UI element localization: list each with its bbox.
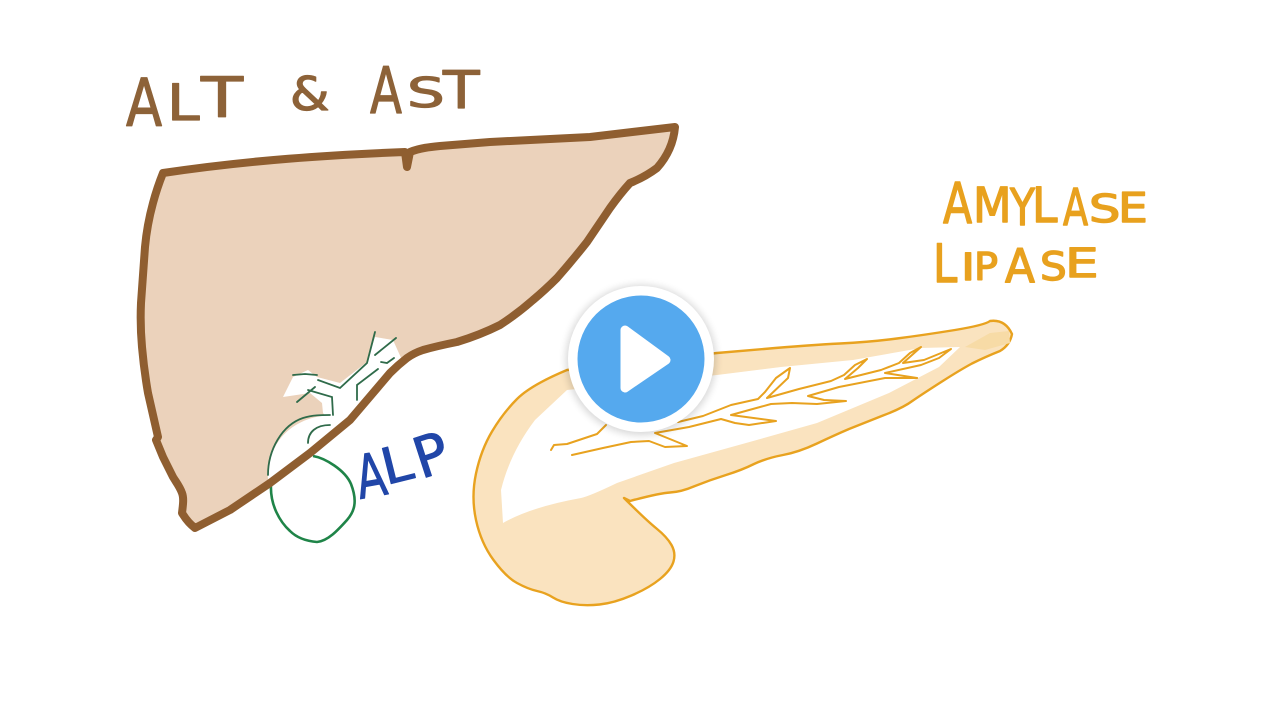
label: AMYLASE: E	[1118, 185, 1148, 232]
label: AMYLASE: Y	[1009, 178, 1036, 237]
label: LIPASE: L	[933, 234, 957, 295]
bile ducts and gallbladder neck	[268, 332, 396, 475]
gallbladder upper white area	[268, 415, 345, 487]
pancreas inner white area	[501, 347, 960, 523]
label: LIPASE: E	[1065, 240, 1099, 287]
liver outline	[141, 127, 675, 528]
label: ALT & AST: L	[167, 73, 200, 132]
label: ALP: P	[405, 420, 457, 492]
label: LIPASE	[933, 234, 1099, 295]
label: ALP	[350, 420, 457, 514]
label: ALT & AST: S	[407, 70, 445, 117]
label: ALT & AST: T	[200, 66, 244, 130]
label: ALP: L	[375, 433, 419, 497]
icon: play button	[566, 285, 716, 435]
gallbladder lower outline	[271, 456, 355, 542]
label: LIPASE: S	[1040, 243, 1067, 290]
label: LIPASE: P	[974, 246, 998, 290]
label: ALT & AST: T	[442, 61, 480, 121]
label: ALT & AST: A	[126, 66, 162, 143]
label: AMYLASE: L	[1032, 179, 1057, 234]
pancreas tail shading	[965, 331, 1010, 350]
pancreatic duct branches	[551, 347, 951, 455]
label: ALT & AST: A	[370, 55, 402, 129]
pancreas body	[474, 321, 1012, 605]
label: AMYLASE: M	[973, 177, 1012, 233]
pancreas	[474, 321, 1012, 605]
liver fill	[141, 127, 675, 528]
label: AMYLASE	[943, 171, 1148, 238]
label: LIPASE: A	[1005, 239, 1035, 293]
label: ALP: A	[350, 440, 392, 514]
label: AMYLASE: A	[943, 171, 972, 237]
label: AMYLASE: S	[1089, 188, 1120, 231]
label: LIPASE: I	[961, 246, 975, 289]
label: ALT & AST	[126, 55, 480, 143]
liver	[141, 127, 675, 542]
bile duct white area	[283, 337, 402, 425]
label: AMYLASE: A	[1063, 179, 1089, 238]
label: ALT & AST: &	[290, 68, 329, 121]
